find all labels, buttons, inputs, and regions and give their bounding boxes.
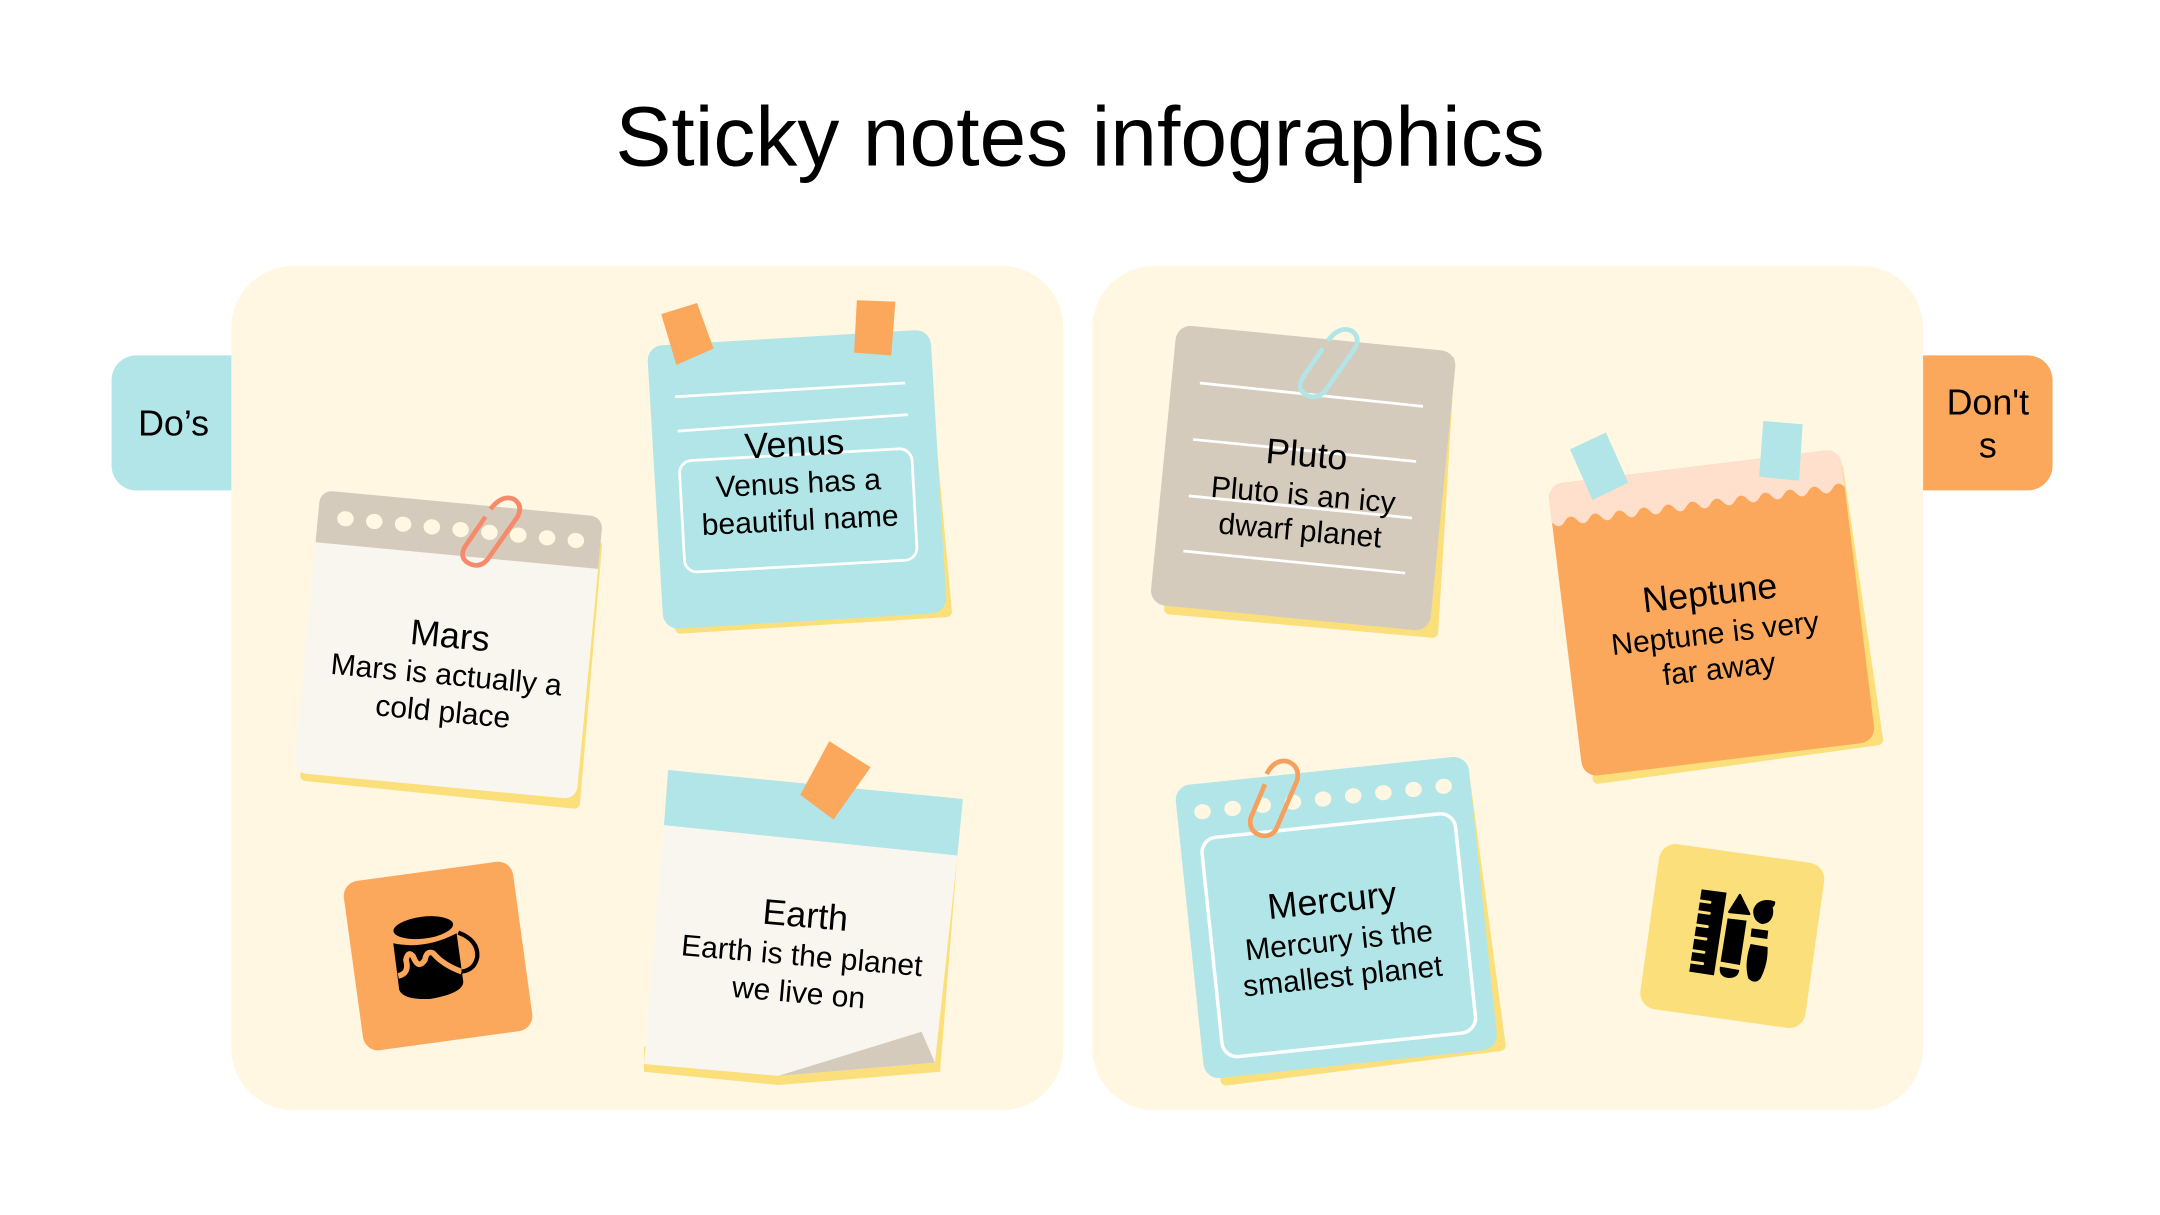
note: Mars: Mars is actually a [329, 648, 564, 703]
panel: Do's [231, 266, 1063, 1110]
note: Venus [647, 300, 947, 629]
panel: Don'ts [1092, 266, 1923, 1110]
note: Mercury [1174, 755, 1500, 1080]
note: Mercury: Mercury [1266, 874, 1398, 927]
tab: Do's: Do’s [138, 403, 209, 443]
note: Mars [294, 490, 603, 803]
note: Earth: Earth is the planet [680, 929, 924, 983]
tab: Don'ts [1923, 355, 2053, 490]
note: Pluto: Pluto [1264, 431, 1349, 478]
note: Earth: we live on [730, 971, 867, 1015]
note: Pluto [1150, 324, 1457, 632]
title: Sticky notes infographics [615, 89, 1545, 183]
note: Neptune: Neptune [1640, 566, 1779, 621]
note: Venus: beautiful name [701, 500, 899, 542]
icon card: art tools [1638, 842, 1826, 1030]
note: Neptune: far away [1661, 647, 1777, 692]
note: Mars: Mars [409, 612, 492, 659]
note: Pluto: dwarf planet [1217, 507, 1384, 555]
tab: Don'ts: Don't [1947, 383, 2029, 423]
note: Earth [644, 741, 963, 1085]
note: Venus: Venus [744, 422, 845, 467]
note: Mars: cold place [374, 689, 512, 735]
note: Mercury: Mercury is the [1244, 915, 1434, 967]
note: Venus: Venus has a [715, 463, 882, 504]
note: Pluto: Pluto is an icy [1209, 471, 1397, 520]
note: Mercury: smallest planet [1241, 950, 1445, 1004]
tab: Don'ts: s [1979, 425, 1997, 465]
tab: Do's [112, 355, 231, 490]
note: Neptune [1547, 421, 1878, 778]
icon card: paint mug [342, 860, 534, 1052]
note: Neptune: Neptune is very [1610, 606, 1821, 662]
note: Earth: Earth [761, 892, 850, 939]
